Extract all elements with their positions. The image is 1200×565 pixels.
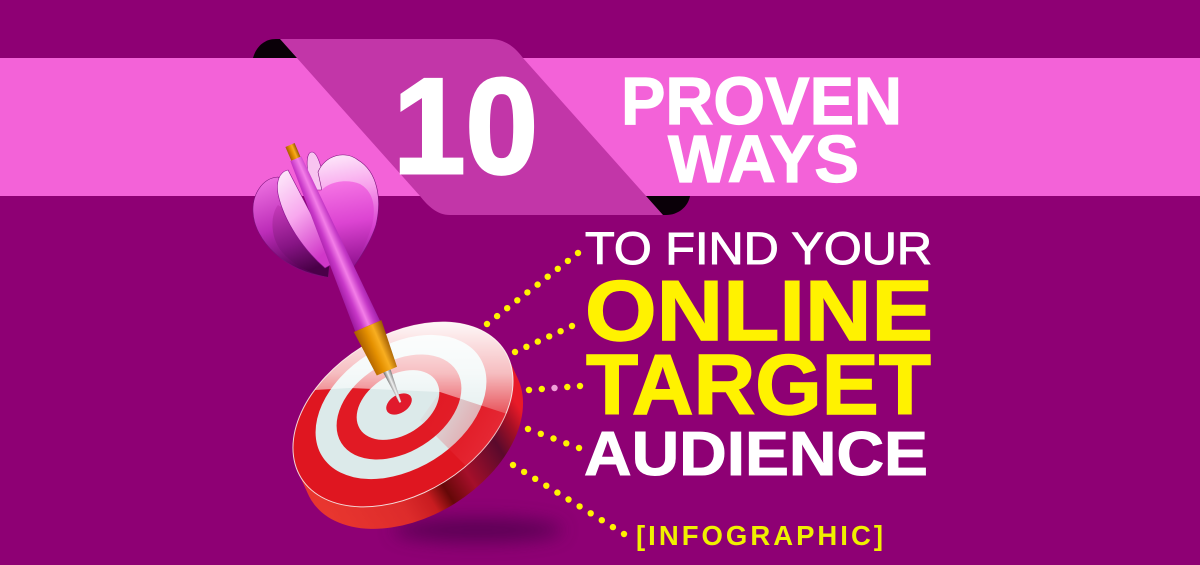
subheading: to find your: TO FIND YOUR [585, 223, 932, 274]
target face rings [259, 283, 547, 546]
dart flights [253, 152, 379, 277]
target gloss highlight [315, 322, 513, 466]
target side wall [262, 289, 557, 565]
heading: online target: TARGET [586, 338, 931, 433]
label: infographic: [INFOGRAPHIC] [636, 520, 883, 551]
dart collar [354, 320, 401, 377]
heading: online target [585, 264, 933, 433]
target shadow [393, 518, 563, 542]
dotted connector lines [484, 250, 627, 537]
heading: proven ways [621, 64, 902, 197]
pink banner band [0, 58, 1200, 196]
ribbon panel behind number [280, 39, 663, 215]
heading: number 10: 10 [393, 50, 538, 202]
ribbon fold: bottom right black [645, 196, 690, 215]
dart body [276, 139, 414, 408]
icon: dart [253, 139, 414, 408]
heading: online target: ONLINE [585, 264, 933, 359]
heading: audience: AUDIENCE [584, 420, 928, 489]
icon: red and white target [292, 322, 523, 529]
dart tail tip [285, 143, 301, 161]
heading: proven ways: WAYS [668, 122, 859, 197]
heading: proven ways: PROVEN [621, 64, 902, 139]
ribbon fold: top left black [253, 39, 299, 58]
dart needle [383, 370, 404, 404]
dart shaft [284, 153, 380, 331]
